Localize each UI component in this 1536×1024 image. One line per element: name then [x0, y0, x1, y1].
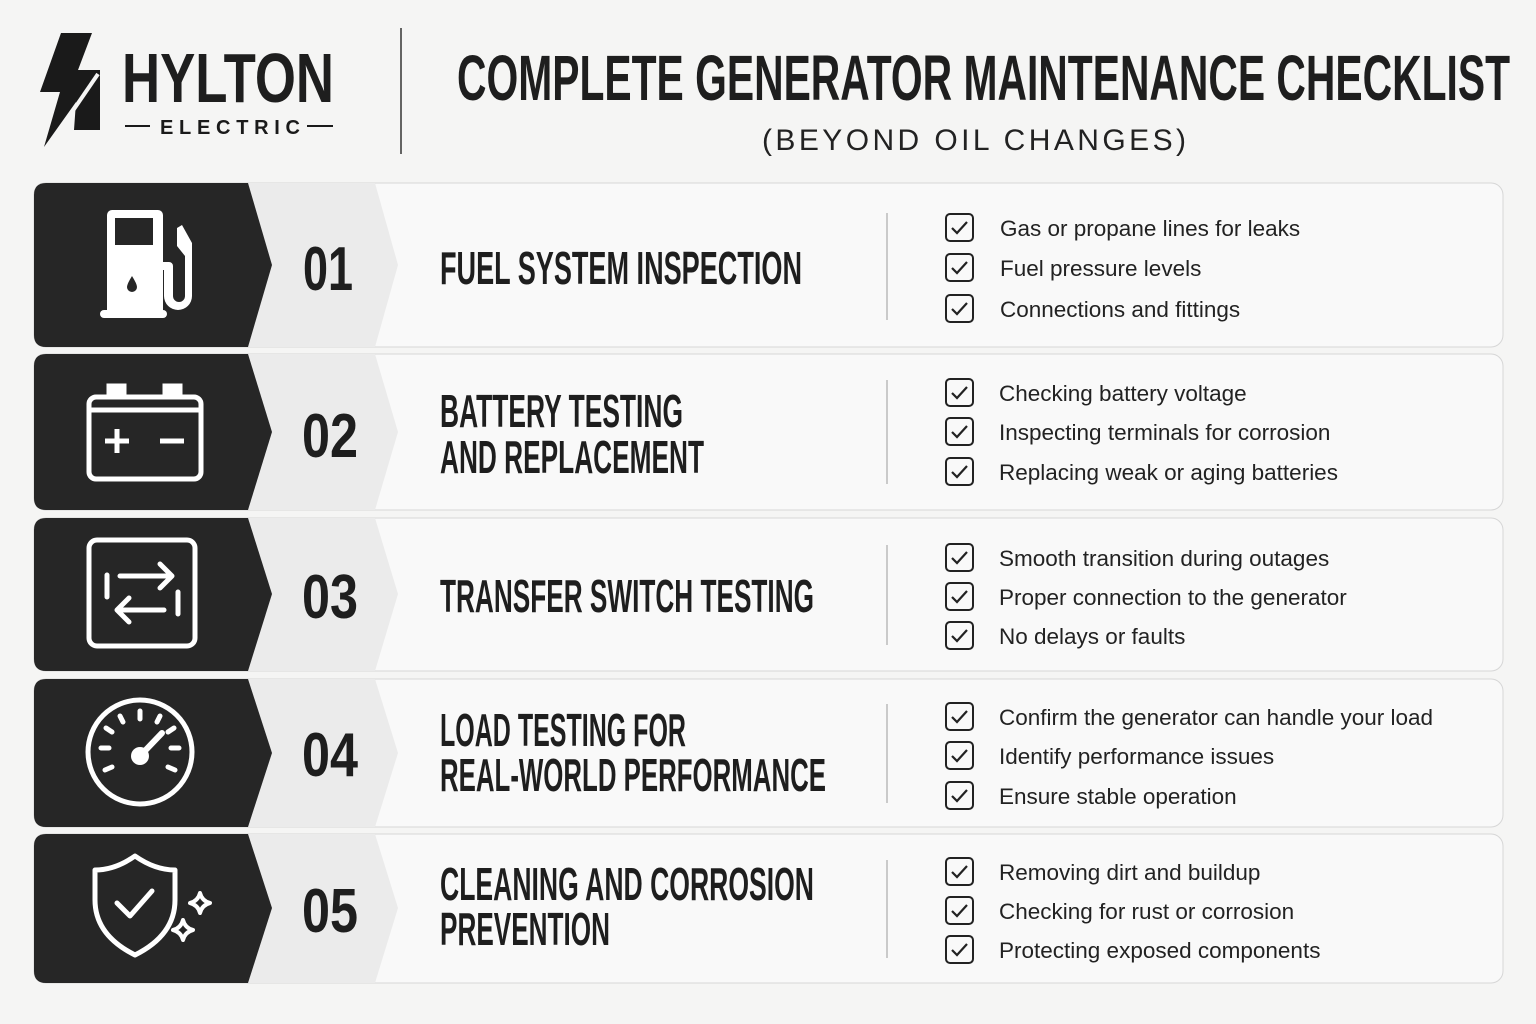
row 5: cleaning: Removing dirt and buildup	[999, 860, 1260, 885]
row 3: transfer switch: Smooth transition during outages	[999, 546, 1329, 571]
row 4: load testing: Identify performance issues	[999, 744, 1274, 769]
row 2: battery: AND REPLACEMENT	[440, 431, 704, 483]
icon: shield with sparkles	[95, 856, 210, 955]
row 5: cleaning: 05	[302, 877, 358, 946]
row 4: load testing: 04	[302, 721, 358, 790]
row 4: load testing: LOAD TESTING FOR	[440, 704, 686, 756]
row 2: battery: BATTERY TESTING	[440, 385, 683, 437]
row 5: cleaning: PREVENTION	[440, 903, 610, 955]
row 4: load testing: REAL-WORLD PERFORMANCE	[440, 749, 826, 801]
row 5: cleaning	[34, 834, 1503, 983]
row 1: fuel system: FUEL SYSTEM INSPECTION	[440, 242, 802, 294]
icon: fuel pump	[100, 210, 192, 318]
logo: HYLTON	[122, 39, 334, 117]
row 4: load testing	[34, 679, 1503, 827]
row 2: battery: Inspecting terminals for corrosion	[999, 420, 1330, 445]
row 1: fuel system: Gas or propane lines for leaks	[1000, 216, 1300, 241]
row 3: transfer switch: TRANSFER SWITCH TESTING	[440, 570, 814, 622]
row 3: transfer switch: No delays or faults	[999, 624, 1185, 649]
row 2: battery: 02	[302, 402, 358, 471]
logo: ELECTRIC	[160, 117, 300, 139]
icon: transfer switch	[89, 540, 195, 646]
icon: lightning bolt	[40, 33, 100, 147]
row 1: fuel system: Connections and fittings	[1000, 297, 1240, 322]
row 5: cleaning: Checking for rust or corrosion	[999, 899, 1294, 924]
row 3: transfer switch	[34, 518, 1503, 671]
row 2: battery: Replacing weak or aging batteries	[999, 460, 1338, 485]
row 4: load testing: Ensure stable operation	[999, 784, 1237, 809]
row 1: fuel system: 01	[303, 235, 353, 304]
icon: battery	[87, 386, 203, 479]
row 3: transfer switch: Proper connection to the generator	[999, 585, 1347, 610]
subtitle: (BEYOND OIL CHANGES)	[762, 124, 1186, 157]
row 5: cleaning: Protecting exposed components	[999, 938, 1320, 963]
row 1: fuel system: Fuel pressure levels	[1000, 256, 1201, 281]
row 1: fuel system	[34, 183, 1503, 347]
logo	[40, 33, 334, 147]
row 2: battery	[34, 354, 1503, 510]
icon: gauge	[88, 700, 192, 804]
row 4: load testing: Confirm the generator can handle your load	[999, 705, 1433, 730]
row 2: battery: Checking battery voltage	[999, 381, 1247, 406]
row 5: cleaning: CLEANING AND CORROSION	[440, 858, 814, 910]
row 3: transfer switch: 03	[302, 563, 358, 632]
